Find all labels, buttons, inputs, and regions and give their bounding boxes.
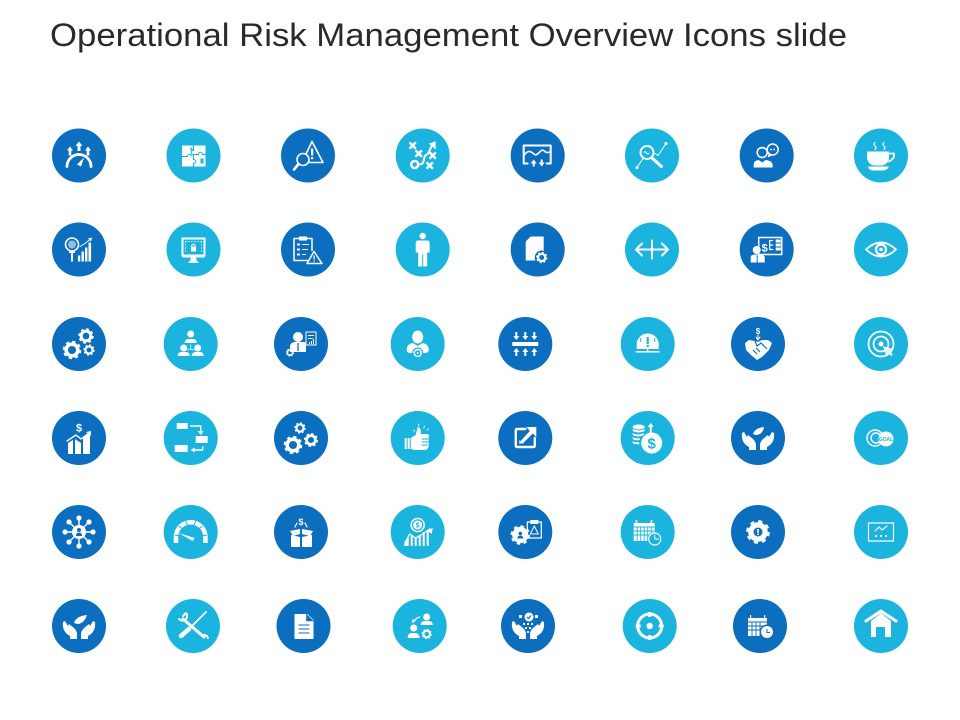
icon: horizontal double arrow [625,222,679,276]
icon: team hierarchy [164,317,218,371]
icon: network hub with person [52,505,106,559]
icon: hands holding leaf [731,411,785,465]
icon: person with gear badge [391,317,445,371]
icon: checklist with warning [281,222,335,276]
icon: dollar growth chart: $ [76,422,82,434]
icon: magnifier and growth bars [52,222,106,276]
icon: hands holding leaf large [52,599,106,653]
icon: presenter with board [740,222,794,276]
icon: process flow boxes [164,411,218,465]
icon: home [854,599,908,653]
icon: person with speech bubble [740,128,794,182]
icon: monitor with lock [166,222,220,276]
icon: goal target [854,411,908,465]
icon: warning magnifier [281,128,335,182]
icon: gear with alert [731,505,785,559]
icon: magnifier on trend line [625,128,679,182]
icon: coins and dollar: $ [648,436,657,452]
icon: puzzle [166,128,220,182]
icon: wrench and screwdriver [166,599,220,653]
icon: manager with report and gear [274,317,328,371]
icon: presenter with board: $ [762,242,768,254]
icon: target with cursor [854,317,908,371]
icon: eye [854,222,908,276]
icon: three gears with cogs [52,317,106,371]
icon: gauge with up arrows [52,128,106,182]
icon: calendar with clock [621,505,675,559]
title: Operational Risk Management Overview Icons slide [50,17,847,53]
icon: compression arrows [498,317,552,371]
icon: person [396,222,450,276]
icon: three gears [274,411,328,465]
icon: thumbs up [391,411,445,465]
icon: hands with check badge and stars [501,599,555,653]
icon: cloud dome with alert [621,317,675,371]
icon: open box with money: $ [298,517,304,527]
icon: chart frame with arrows [511,128,565,182]
icon: coin and growth chart [391,505,445,559]
icon: speedometer [164,505,218,559]
icon: analytics board [854,505,908,559]
icon: crosshair [623,599,677,653]
icon: goal target: GOAL [879,437,893,443]
icon: strategy play [396,128,450,182]
icon: open box with money [274,505,328,559]
icon: coin and growth chart: $ [416,523,420,530]
icon: document [276,599,330,653]
icon: dollar growth chart [52,411,106,465]
icon: document with gear [511,222,565,276]
icon: handshake with dollar: $ [756,327,761,336]
icon: calendar with clock dark [733,599,787,653]
icon: coffee cup [854,128,908,182]
icon: people swap with gear [393,599,447,653]
icon: coins and dollar [621,411,675,465]
icon: gear user with clipboard warning [498,505,552,559]
icon: external link square [498,411,552,465]
icon: handshake with dollar [731,317,785,371]
